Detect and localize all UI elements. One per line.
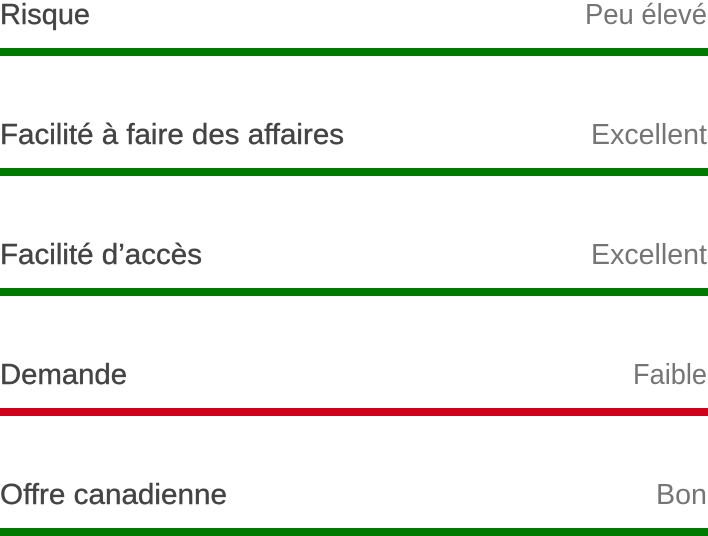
row: Offre canadienne	[0, 479, 708, 536]
row: Facilité à faire des affaires	[0, 119, 708, 176]
status bar: green	[0, 168, 708, 176]
label: Facilité à faire des affaires: Facilité à faire des affaires	[0, 119, 344, 151]
row: Demande	[0, 359, 708, 416]
label: Demande: Demande	[0, 359, 127, 391]
value: Bon: Bon	[656, 479, 707, 511]
label: Facilité d'accès: Facilité d’accès	[0, 239, 202, 271]
value: Excellent: Excellent	[591, 119, 707, 151]
status bar: green	[0, 528, 708, 536]
row: Facilité d'accès	[0, 239, 708, 296]
row: Risque	[0, 0, 708, 56]
status bar: green	[0, 288, 708, 296]
value: Excellent: Excellent	[591, 239, 707, 271]
label: Offre canadienne: Offre canadienne	[0, 479, 227, 511]
status bar: red	[0, 408, 708, 416]
status bar: green	[0, 48, 708, 56]
